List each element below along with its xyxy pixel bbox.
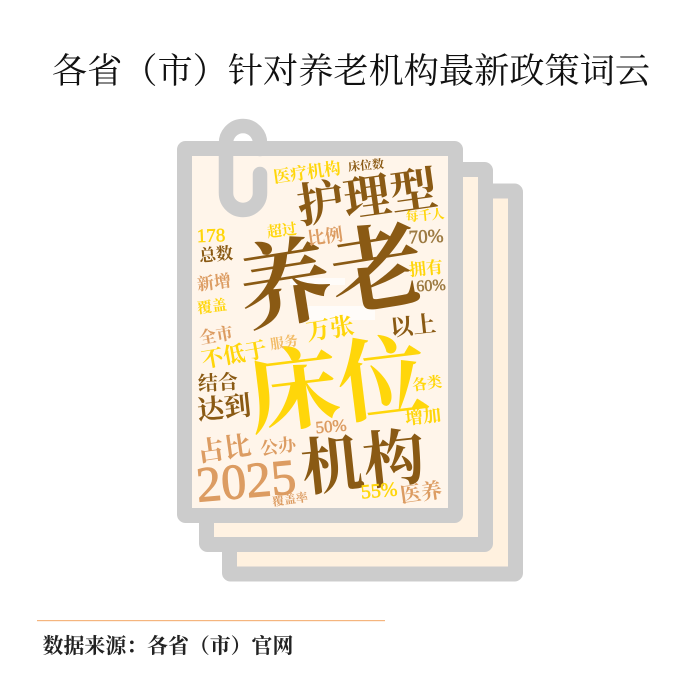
icon: paperclip — [226, 126, 260, 210]
word: 占比: 占比 — [195, 430, 253, 468]
word: 服务: 服务 — [269, 332, 299, 353]
word: 比例: 比例 — [306, 224, 344, 249]
word: 60%: 60% — [416, 277, 446, 295]
word: 医养: 医养 — [399, 478, 444, 508]
word: 养老: 养老 — [232, 213, 432, 344]
word: 公办: 公办 — [259, 434, 299, 459]
word: 机构: 机构 — [298, 424, 429, 504]
faint highlight behind words — [290, 278, 375, 320]
panel: middle document sheet — [206, 170, 486, 544]
word: 床位数: 床位数 — [347, 156, 385, 174]
word: 全市: 全市 — [198, 323, 235, 348]
word: 70%: 70% — [408, 226, 444, 249]
word: 覆盖率: 覆盖率 — [271, 489, 310, 509]
word: 增加: 增加 — [404, 405, 442, 428]
word: 覆盖: 覆盖 — [196, 296, 228, 317]
word: 拥有: 拥有 — [408, 257, 444, 280]
word: 超过: 超过 — [266, 220, 298, 241]
word: 护理型: 护理型 — [294, 163, 441, 234]
word cloud — [194, 156, 446, 513]
word: 结合: 结合 — [197, 370, 239, 395]
word: 床位: 床位 — [243, 327, 434, 447]
word: 55%: 55% — [360, 478, 398, 504]
panel: back document sheet — [230, 191, 516, 574]
word: 总数: 总数 — [198, 243, 234, 266]
word: 每千人: 每千人 — [405, 206, 445, 224]
word: 万张: 万张 — [304, 312, 356, 346]
panel: front document sheet — [184, 148, 456, 516]
word: 以上: 以上 — [389, 311, 437, 341]
word: 各类: 各类 — [411, 373, 443, 395]
word: 医疗机构: 医疗机构 — [272, 158, 342, 187]
word: 2025: 2025 — [194, 448, 298, 513]
word: 178: 178 — [196, 225, 226, 247]
word: 不低于: 不低于 — [199, 337, 269, 373]
source note: 数据来源：各省（市）官网 — [43, 634, 293, 658]
word: 达到: 达到 — [196, 390, 253, 426]
word: 50%: 50% — [315, 416, 347, 437]
title: 各省（市）针对养老机构最新政策词云 — [52, 52, 650, 91]
word: 新增: 新增 — [196, 271, 232, 294]
divider line — [37, 620, 385, 621]
